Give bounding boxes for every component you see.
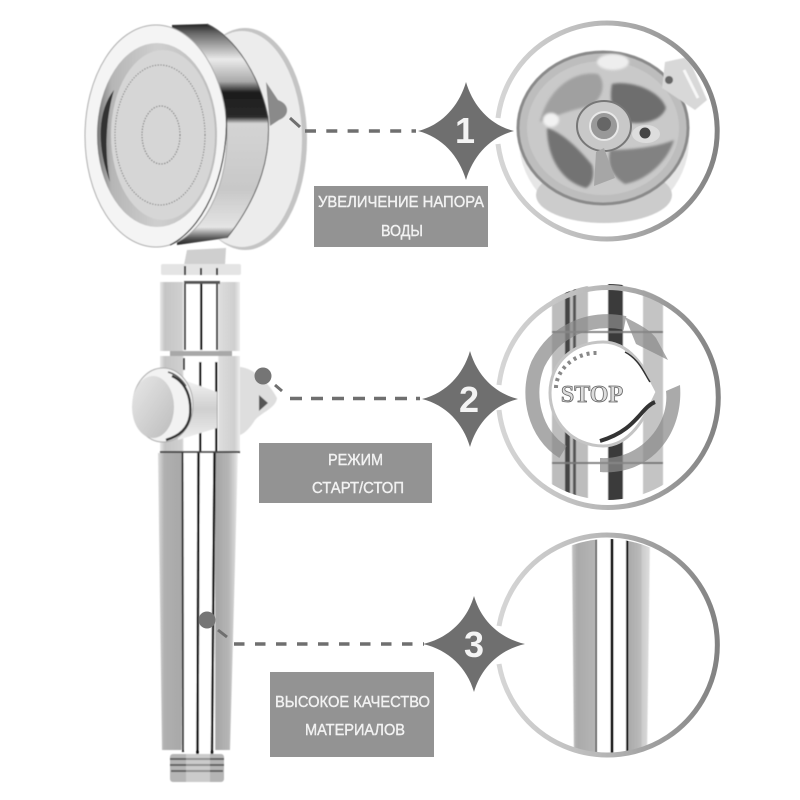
- threaded connector: [170, 754, 224, 782]
- hub: [577, 101, 660, 186]
- ring: [498, 23, 717, 239]
- handle tube: [158, 453, 238, 754]
- shower head product: [85, 24, 307, 782]
- detail circle 2: stop button: [499, 282, 718, 507]
- switch housing: [160, 356, 240, 453]
- detail circle 1: turbine fan: [498, 23, 717, 239]
- nozzle dots inner ring: [142, 106, 180, 164]
- pointer 1: dashed line from head: [290, 118, 416, 131]
- head inner face: [97, 43, 217, 227]
- badge 3: 3: [464, 624, 484, 665]
- label 1: ВОДЫ: [381, 223, 423, 240]
- clear housing: [518, 52, 689, 223]
- button: [550, 342, 657, 446]
- badge 1: [418, 82, 514, 180]
- right stop switch: [240, 367, 277, 435]
- tube closeup: [572, 537, 650, 757]
- upper cylinder: [160, 281, 240, 358]
- badge 3: [423, 596, 525, 692]
- pointer 3: dot and dashed line: [198, 612, 424, 644]
- label 2: [259, 443, 432, 503]
- connector dot on head: [266, 82, 287, 126]
- ring: [499, 535, 717, 755]
- housing tab: [662, 57, 707, 110]
- detail circle 3: chrome tube: [499, 535, 717, 757]
- tube closeup: [552, 282, 663, 502]
- label 2: СТАРТ/СТОП: [312, 480, 404, 497]
- badge 2: [422, 351, 518, 447]
- label 3: ВЫСОКОЕ КАЧЕСТВО: [275, 694, 430, 711]
- side knob: [132, 368, 217, 442]
- label 3: МАТЕРИАЛОВ: [305, 722, 405, 739]
- label 1: УВЕЛИЧЕНИЕ НАПОРА: [318, 194, 484, 211]
- ring: [499, 287, 718, 507]
- pointer 2: dot and dashed line: [254, 368, 420, 398]
- head front ring: [85, 25, 227, 247]
- neck: [184, 248, 226, 265]
- badge 1: 1: [455, 110, 475, 151]
- rotation arrows: [532, 317, 680, 472]
- nozzle dots outer ring: [115, 65, 205, 205]
- head chrome band: [172, 24, 269, 245]
- badge 2: 2: [459, 379, 479, 420]
- collar: [161, 264, 241, 275]
- turbine blades: [540, 54, 674, 188]
- button: STOP: [561, 382, 623, 408]
- label 1: [314, 186, 488, 247]
- label 2: РЕЖИМ: [328, 452, 383, 469]
- label 3: [270, 672, 434, 757]
- head back ring: [182, 28, 307, 250]
